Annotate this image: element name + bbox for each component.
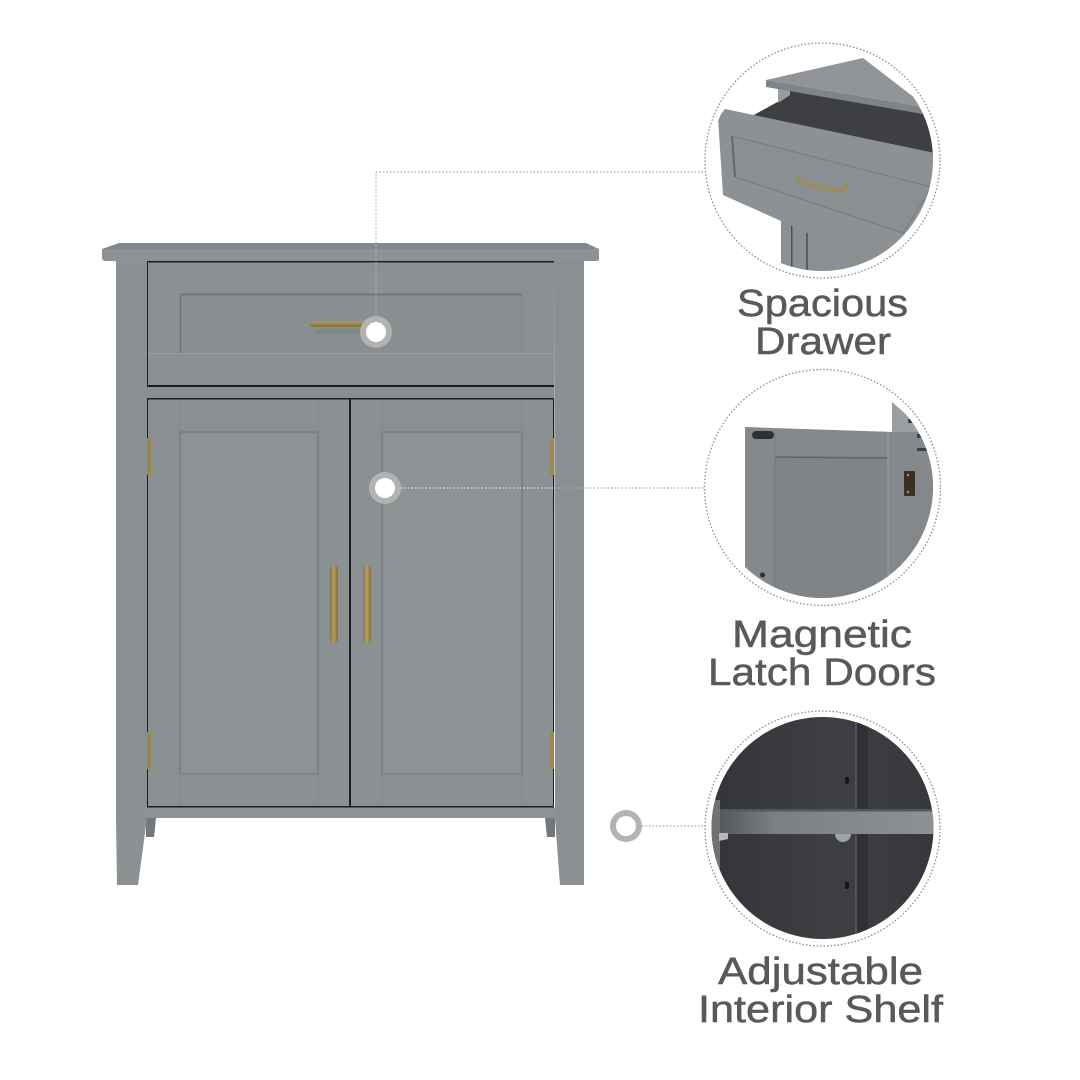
drawer handle [310,321,390,334]
label: adjustable interior shelf: Adjustable [718,951,923,993]
label: spacious drawer: Spacious [737,283,908,325]
cabinet top detail [766,58,923,114]
cabinet back legs [146,818,555,837]
cabinet right post and leg [554,261,584,885]
right door [351,400,553,806]
interior post [856,715,868,941]
shelf pin [835,834,851,842]
open drawer interior [752,90,935,156]
cabinet left post and leg [116,261,147,885]
label: spacious drawer: Drawer [755,321,891,363]
right door handle [363,565,371,643]
door magnet catch [752,431,774,439]
left door [148,400,349,806]
label: magnetic latch doors: Magnetic [732,614,912,656]
label: magnetic latch doors [708,614,936,694]
drawer front detail [718,109,933,260]
connector: drawer marker to drawer detail [376,172,706,316]
connector: door marker to door detail [401,487,705,489]
cabinet interior [710,715,936,941]
magnet plate [904,471,915,496]
drawer pull detail [799,176,846,191]
label: adjustable interior shelf: Interior Shelf [698,989,943,1031]
door fronts below drawer [781,221,886,271]
drawer recessed panel [180,294,522,353]
cabinet post detail [778,89,790,103]
drawer front [148,262,554,385]
right door panel [382,432,522,774]
marker: drawer [360,316,392,348]
screw [760,572,765,578]
drawer recessed panel detail [732,136,932,233]
cabinet carcass interior gaps [147,261,554,808]
cabinet illustration [102,243,599,885]
shelf bracket [719,833,728,841]
bottom rail [147,808,555,818]
door stile and inner post [892,432,933,573]
middle rail [147,387,554,398]
dark cabinet interior bits [908,419,927,451]
door edge view [745,427,892,600]
door recessed panel [775,576,888,598]
detail circle: spacious drawer [705,43,950,290]
detail circle: adjustable interior shelf [705,711,940,946]
adjustment holes [845,777,849,889]
connector: shelf marker to shelf detail [642,825,705,827]
door hinges [147,438,554,769]
marker: shelf [610,810,642,842]
left door panel [180,432,318,774]
rear cabinet side [892,402,933,573]
label: adjustable interior shelf [698,951,943,1031]
label: spacious drawer [737,283,908,363]
shelf [720,809,936,834]
marker: door latch [369,472,401,504]
cabinet top [102,243,599,261]
detail circle: magnetic latch doors [704,370,940,606]
left door handle [330,565,338,643]
label: magnetic latch doors: Latch Doors [708,652,936,694]
left door edge [712,800,720,870]
